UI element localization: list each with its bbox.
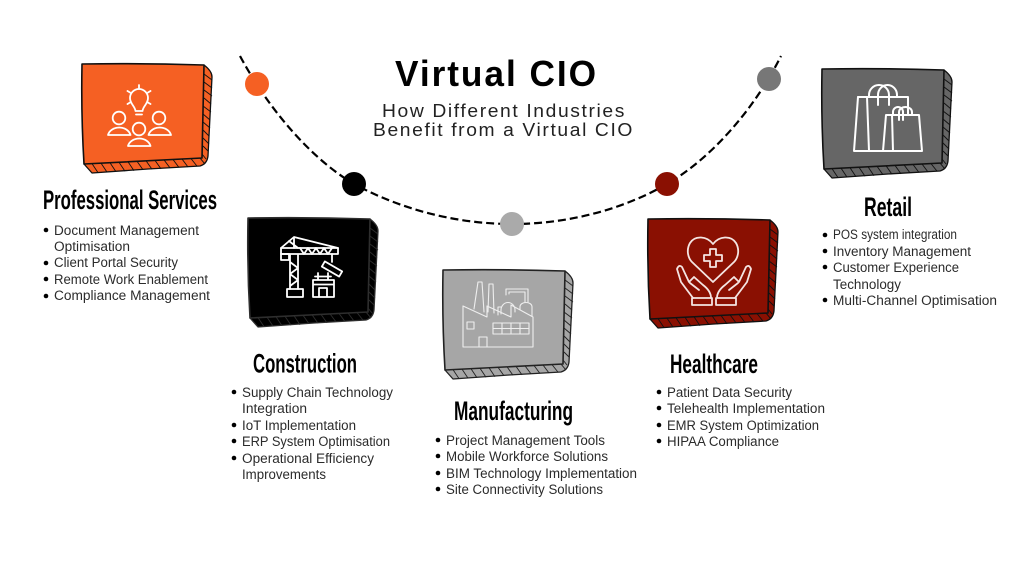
icon: people and light bulb — [108, 85, 171, 146]
panel: retail — [822, 69, 997, 308]
bullet list: ERP System Optimisation — [242, 434, 390, 449]
dashed timeline arc — [240, 56, 781, 224]
panel: manufacturing — [436, 270, 637, 497]
card: orange — [82, 64, 212, 173]
timeline dot: light grey — [500, 212, 524, 236]
bullet list: Telehealth Implementation — [667, 401, 825, 416]
heading: Professional Services — [43, 185, 217, 215]
heading: Retail — [864, 192, 912, 222]
bullet list: Improvements — [242, 467, 326, 482]
subtitle — [373, 101, 634, 140]
bullet list: Optimisation — [54, 239, 130, 254]
icon: crane and building — [281, 237, 342, 297]
bullet list: Operational Efficiency — [242, 451, 374, 466]
bullet list: Site Connectivity Solutions — [446, 482, 603, 497]
bullet list — [232, 385, 393, 482]
heading: Healthcare — [670, 349, 758, 379]
bullet list: Document Management — [54, 223, 199, 238]
bullet list: Patient Data Security — [667, 385, 792, 400]
bullet list — [436, 433, 637, 497]
icon: shopping bags — [854, 85, 922, 151]
bullet list: Integration — [242, 401, 307, 416]
timeline dot: black — [342, 172, 366, 196]
bullet list: HIPAA Compliance — [667, 434, 779, 449]
bullet list: Remote Work Enablement — [54, 272, 208, 287]
bullet list: Mobile Workforce Solutions — [446, 449, 608, 464]
bullet list: Client Portal Security — [54, 255, 178, 270]
heading: Manufacturing — [454, 396, 573, 426]
bullet list — [44, 223, 210, 303]
icon: factory — [463, 282, 533, 347]
bullet list: Compliance Management — [54, 288, 210, 303]
title: Virtual CIO — [395, 53, 598, 94]
subtitle: Benefit from a Virtual CIO — [373, 120, 634, 140]
bullet list: Technology — [833, 277, 901, 292]
bullet list — [657, 385, 825, 449]
heading: Construction — [253, 348, 357, 378]
subtitle: How Different Industries — [382, 101, 626, 121]
bullet list: Multi-Channel Optimisation — [833, 293, 997, 308]
card: dark red — [648, 219, 778, 328]
icon: hands holding heart — [677, 237, 751, 305]
panel: healthcare — [648, 219, 825, 449]
timeline dot: dark red — [655, 172, 679, 196]
bullet list: Project Management Tools — [446, 433, 605, 448]
bullet list: EMR System Optimization — [667, 418, 819, 433]
bullet list: BIM Technology Implementation — [446, 466, 637, 481]
card: black — [248, 218, 378, 327]
bullet list: IoT Implementation — [242, 418, 356, 433]
card: dark grey — [822, 69, 952, 178]
timeline dot: grey — [757, 67, 781, 91]
bullet list — [823, 227, 997, 308]
panel: construction — [232, 218, 393, 482]
card: light grey — [443, 270, 573, 379]
bullet list: Customer Experience — [833, 260, 959, 275]
bullet list: Inventory Management — [833, 244, 971, 259]
bullet list: Supply Chain Technology — [242, 385, 393, 400]
panel: professional services — [43, 64, 217, 303]
bullet list: POS system integration — [833, 227, 957, 242]
timeline dot: orange — [245, 72, 269, 96]
